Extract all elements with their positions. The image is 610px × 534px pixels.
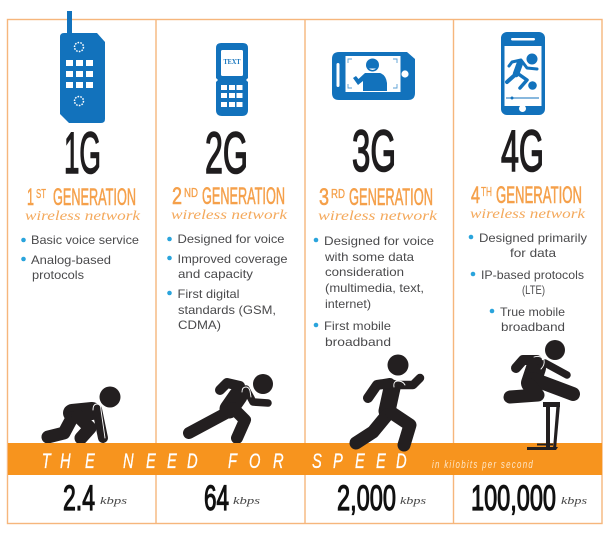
speed: 4G: kbps <box>561 496 587 507</box>
heading: 2nd generation: GENERATION <box>202 183 285 210</box>
bullet list: 2G <box>167 232 288 332</box>
heading: 2nd generation: ND <box>184 185 198 200</box>
bullet list: 2G: Improved coverage <box>178 252 288 266</box>
heading: 3rd generation: 3 <box>319 184 329 211</box>
bullet list: 3G: broadband <box>325 335 391 349</box>
figure: runner striding <box>356 354 420 445</box>
panel: 1G <box>21 11 141 438</box>
bullet list: 1G: Analog-based <box>31 253 111 267</box>
bullet list: 3G: (multimedia, text, <box>325 281 424 295</box>
heading: 3rd generation: RD <box>331 186 345 201</box>
bullet list: 4G: IP-based protocols <box>481 268 584 282</box>
bullet list: 3G <box>314 234 434 349</box>
bullet list: 4G <box>469 231 587 334</box>
heading: 2nd generation <box>172 183 285 210</box>
panel: 2G <box>167 43 288 438</box>
figure: sprinter starting <box>189 374 273 438</box>
panel: 1G: 1G <box>64 121 101 186</box>
icon: 3G smartphone with video call <box>332 52 415 100</box>
figure: hurdle <box>527 402 560 450</box>
heading: 3rd generation: GENERATION <box>349 184 433 211</box>
icon: 1G brick phone <box>60 11 105 123</box>
heading: 2G: 2G <box>205 121 248 186</box>
speed: 2G <box>204 479 260 518</box>
bullet list: 3G: consideration <box>325 265 404 279</box>
speed: 2G: kbps <box>233 496 260 507</box>
bullet list: 3G: internet) <box>325 297 371 311</box>
subheading: wireless network: wireless network <box>171 208 288 223</box>
subheading: wireless network: wireless network <box>318 209 438 224</box>
heading: 1st generation: GENERATION <box>53 184 136 211</box>
speed: 1G: 2.4 <box>63 479 95 518</box>
heading: 4th generation: TH <box>481 184 492 199</box>
icon: 2G flip phone <box>216 43 248 116</box>
figure: crouching runner <box>48 386 120 438</box>
speed: 3G: kbps <box>400 496 426 507</box>
bullet list: 2G: First digital <box>178 287 240 301</box>
heading: 3rd generation <box>319 184 433 211</box>
subheading: wireless network: wireless network <box>25 209 141 224</box>
heading: 1st generation <box>27 184 136 211</box>
speed: 1G: kbps <box>100 496 127 507</box>
icon: 2G flip phone: TEXT <box>224 57 240 66</box>
banner title: THE NEED FOR SPEED <box>42 449 407 473</box>
bullet list: 3G: with some data <box>324 250 414 264</box>
bullet list: 4G: Designed primarily <box>479 231 587 245</box>
panel: 4G <box>469 32 587 397</box>
bullet list: 2G: CDMA) <box>178 318 221 332</box>
icon: 4G smartphone with sport video <box>501 32 545 115</box>
speed: 3G: 2,000 <box>337 479 396 518</box>
bullet list: 4G: for data <box>510 246 556 260</box>
bullet list: 3G: Designed for voice <box>324 234 434 248</box>
heading: 3G: 3G <box>352 119 396 184</box>
bullet list: 2G: Designed for voice <box>178 232 285 246</box>
heading: 1st generation: 1 <box>27 184 34 211</box>
speed: 4G: 100,000 <box>471 479 556 518</box>
heading: 4G: 4G <box>501 119 544 184</box>
bullet list: 3G: First mobile <box>324 319 391 333</box>
heading: 1st generation: ST <box>36 186 46 201</box>
banner: the need for speed <box>8 443 602 475</box>
speed: 2G: 64 <box>204 479 229 518</box>
bullet list: 1G: protocols <box>32 268 84 282</box>
subheading: wireless network: wireless network <box>470 207 586 222</box>
bullet list: 1G: Basic voice service <box>31 233 139 247</box>
banner unit note: in kilobits per second <box>432 459 533 471</box>
bullet list: 4G: broadband <box>501 320 565 334</box>
heading: 2nd generation: 2 <box>172 183 182 210</box>
figure: hurdler jumping <box>510 340 573 397</box>
bullet list: 4G: (LTE) <box>522 283 545 297</box>
heading: 4th generation <box>471 182 582 209</box>
bullet list: 4G: True mobile <box>500 305 565 319</box>
bullet list: 2G: and capacity <box>178 267 253 281</box>
bullet list: 1G <box>21 233 139 282</box>
panel: 3G <box>314 52 438 349</box>
heading: 4th generation: 4 <box>471 182 480 209</box>
bullet list: 2G: standards (GSM, <box>178 303 276 317</box>
